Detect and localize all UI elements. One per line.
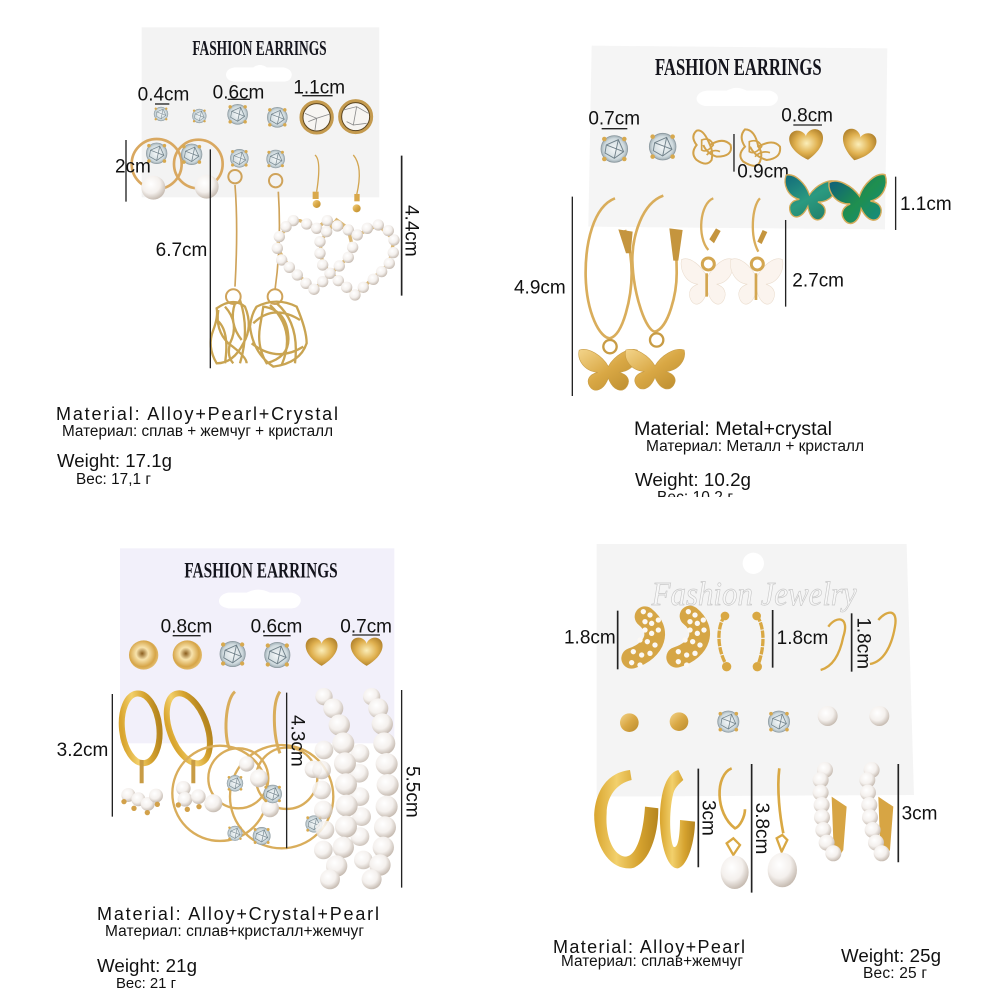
pearls and stones on hoops bbox=[204, 756, 322, 845]
dimension 3cm right bbox=[898, 764, 938, 862]
crystal studs bbox=[718, 711, 790, 732]
dimension label 0.6cm: 0.6cm bbox=[213, 82, 264, 103]
panel: earring set 1 bbox=[115, 27, 422, 368]
heading: FASHION EARRINGS bbox=[655, 55, 822, 81]
dimension 1.1cm: 1.1cm bbox=[900, 194, 952, 215]
dimension 0.8cm: 0.8cm bbox=[161, 616, 212, 637]
dimension 1.1cm bbox=[896, 177, 952, 230]
chunky C hoops bbox=[594, 770, 695, 868]
gold butterfly drops bbox=[579, 333, 685, 390]
dimension 0.8cm: 0.8cm bbox=[781, 106, 833, 127]
caption: set 1 material: Материал: сплав + жемчуг + кристалл bbox=[62, 423, 333, 440]
pearl studs bbox=[818, 706, 889, 726]
pearl cluster drops bbox=[121, 760, 206, 815]
caption: set 3 weight bbox=[97, 955, 197, 992]
heading: FASHION EARRINGS bbox=[192, 38, 327, 60]
panel: earring set 4 bbox=[564, 544, 938, 893]
card hole bbox=[743, 553, 764, 574]
twisted gold hoops bbox=[719, 613, 896, 670]
crystal studs bbox=[220, 641, 290, 668]
dimension 3.2cm: 3.2cm bbox=[57, 740, 108, 761]
card hanger hole bbox=[697, 88, 778, 106]
caption: set 2 weight: Вес: 10,2 г bbox=[657, 489, 733, 506]
dimension 1.8cm left bbox=[564, 611, 618, 669]
dimension label 1.1cm: 1.1cm bbox=[293, 77, 345, 98]
dome studs bbox=[129, 640, 202, 670]
dimension 2.7cm bbox=[786, 220, 844, 307]
dimension 4.9cm: 4.9cm bbox=[514, 277, 566, 298]
caption: set 1 material: Material: Alloy+Pearl+Crystal bbox=[56, 404, 338, 424]
dimension 3.8cm rotated bbox=[751, 764, 772, 893]
small ear hoops bbox=[226, 692, 280, 753]
crystal studs bbox=[601, 133, 676, 162]
dimension 1.8cm middle: 1.8cm bbox=[777, 628, 828, 649]
caption: set 3 material: Material: Alloy+Crystal+Pearl bbox=[97, 904, 379, 924]
enamel butterfly studs bbox=[780, 174, 891, 226]
dimension 2cm: 2cm bbox=[115, 156, 151, 177]
pearl heart earrings hooks bbox=[313, 155, 361, 212]
dimension 6.7cm: 6.7cm bbox=[156, 240, 207, 261]
caption: set 1 material bbox=[56, 404, 338, 440]
card bbox=[588, 46, 887, 229]
caption: set 2 material: Материал: Металл + кристалл bbox=[646, 438, 864, 455]
dimension 2.7cm: 2.7cm bbox=[792, 271, 844, 292]
panel: earring set 3 bbox=[57, 548, 423, 889]
dimension 0.7cm: 0.7cm bbox=[340, 616, 392, 637]
wire butterfly studs bbox=[693, 129, 780, 166]
gold heart studs bbox=[306, 638, 383, 666]
dimension 3cm rotated bbox=[697, 769, 718, 867]
dimension 1.8cm left: 1.8cm bbox=[564, 627, 616, 648]
caption: set 3 weight: Вес: 21 г bbox=[116, 976, 176, 992]
dimension 3.2cm bbox=[57, 694, 112, 817]
crystal studs bbox=[154, 104, 287, 127]
caption: set 4 weight bbox=[841, 945, 941, 982]
caption: set 1 weight bbox=[57, 450, 172, 488]
pearl crescent earrings bbox=[629, 609, 707, 668]
dimension 0.9cm: 0.9cm bbox=[737, 162, 789, 183]
card hanger hole bbox=[219, 590, 301, 608]
card bbox=[597, 544, 914, 797]
crystal studs row 2 bbox=[230, 149, 285, 168]
caption: set 1 weight: Weight: 17.1g bbox=[57, 450, 172, 471]
dimension 1.8cm rotated: 1.8cm bbox=[852, 617, 873, 669]
wire hoops with baroque pearl drops bbox=[720, 768, 787, 855]
small hoops bbox=[701, 198, 767, 252]
embossed brand: Fashion Jewelry bbox=[651, 576, 857, 613]
dimension 4.4cm: 4.4cm bbox=[401, 205, 422, 257]
pearl strand hoops front bbox=[315, 688, 399, 889]
dimension 0.6cm: 0.6cm bbox=[251, 616, 302, 637]
pearl C hoops bbox=[813, 762, 893, 861]
dimension 0.9cm bbox=[734, 134, 789, 183]
panel: earring set 2 bbox=[514, 46, 952, 396]
dimension 1.8cm middle bbox=[773, 610, 828, 668]
caption: set 4 material bbox=[553, 937, 745, 970]
caption: set 2 weight: Weight: 10.2g bbox=[635, 469, 751, 490]
large circle hoops with stones bbox=[172, 745, 333, 848]
pearl heart earrings bbox=[272, 215, 400, 301]
oval hoops bbox=[118, 687, 218, 769]
caption: set 2 material bbox=[634, 418, 864, 455]
card bbox=[120, 548, 394, 743]
dimension 3cm rotated: 3cm bbox=[697, 800, 718, 836]
dimension 4.4cm bbox=[401, 156, 422, 296]
caption: set 4 material: Material: Alloy+Pearl bbox=[553, 937, 745, 957]
caption: set 4 material: Материал: сплав+жемчуг bbox=[561, 953, 743, 970]
caption: set 3 material: Материал: сплав+кристалл+жемчуг bbox=[105, 923, 364, 940]
baroque pearls bbox=[721, 853, 797, 889]
caption: set 4 weight: Weight: 25g bbox=[841, 945, 941, 966]
dimension 4.3cm: 4.3cm bbox=[287, 715, 308, 767]
caption: set 4 weight: Вес: 25 г bbox=[863, 965, 927, 982]
dimension label 0.4cm: 0.4cm bbox=[138, 85, 189, 106]
card bbox=[142, 27, 379, 197]
dimension 3cm right: 3cm bbox=[902, 803, 938, 824]
caption: set 3 material bbox=[97, 904, 379, 940]
caption: set 2 material: Material: Metal+crystal bbox=[634, 418, 832, 440]
shell butterfly drops bbox=[681, 258, 783, 304]
gold heart studs bbox=[789, 127, 878, 165]
large hoops bbox=[586, 196, 683, 338]
long drop earrings bbox=[211, 170, 307, 367]
dimension 5.5cm: 5.5cm bbox=[402, 766, 423, 818]
card hanger hole bbox=[226, 65, 292, 82]
marble studs bbox=[301, 101, 371, 133]
caption: set 3 weight: Weight: 21g bbox=[97, 955, 197, 976]
gold disc studs bbox=[620, 712, 688, 732]
dimension 2cm bbox=[115, 140, 151, 202]
ring earrings with pearls bbox=[132, 139, 223, 200]
pearl strand hoop back bbox=[312, 741, 373, 869]
caption: set 1 weight: Вес: 17,1 г bbox=[76, 471, 151, 488]
dimension 0.7cm: 0.7cm bbox=[588, 108, 640, 129]
dimension 3.8cm rotated: 3.8cm bbox=[751, 803, 772, 854]
heading: FASHION EARRINGS bbox=[184, 557, 338, 582]
caption: set 2 weight bbox=[635, 469, 751, 507]
